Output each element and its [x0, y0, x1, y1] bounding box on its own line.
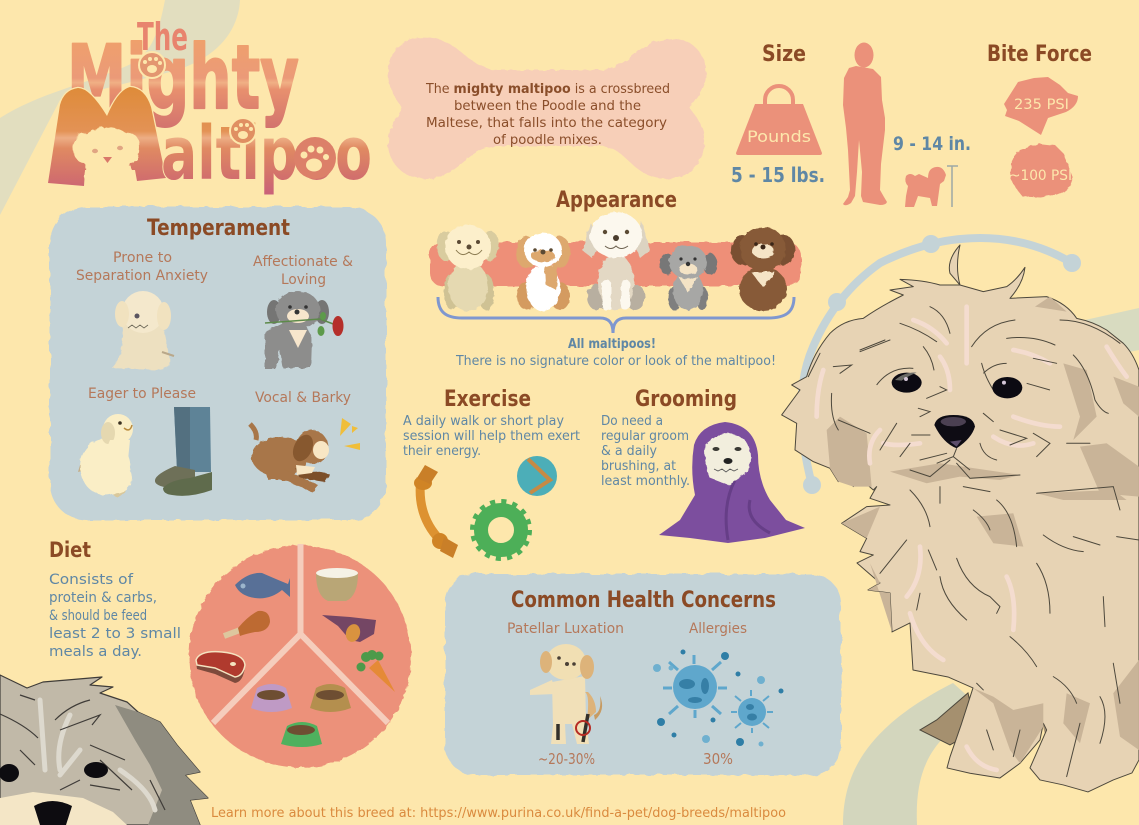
icon: green ring: [473, 502, 529, 558]
bite force heading: Bite Force: [987, 41, 1092, 67]
grooming text: & a daily: [601, 443, 657, 459]
icon: rice bowl: [316, 568, 358, 601]
icon: large dog head: [1004, 77, 1078, 135]
appearance caption: [455, 337, 776, 369]
logo: Mighty: Mighty: [67, 26, 299, 129]
bone text: Maltese, that falls into the category: [426, 115, 667, 131]
icon: drumstick: [224, 611, 270, 636]
appearance caption: All maltipoos!: [568, 337, 656, 352]
grooming section: [601, 386, 805, 543]
dog: grey face: [679, 257, 697, 266]
panel: common health concerns: [445, 574, 841, 775]
icon: legs and shoes: [155, 407, 212, 496]
item: patellar luxation: [507, 621, 624, 768]
size heading: Size: [762, 41, 806, 67]
panel: temperament: [50, 207, 386, 520]
bite force section: [987, 41, 1092, 197]
eyes: [877, 363, 1050, 398]
item: vocal and barky: [250, 390, 360, 492]
virus small: [731, 690, 773, 733]
grooming text: brushing, at: [601, 458, 676, 474]
temperament heading: Temperament: [147, 215, 290, 241]
dark rear between legs: [1033, 690, 1067, 743]
item: vocal and barky: Vocal & Barky: [255, 390, 351, 406]
dog: white and tan face: [533, 248, 553, 254]
panel background: [445, 574, 841, 775]
icon: purple bowl: [251, 684, 292, 712]
icon: weight: Pounds: [747, 127, 811, 146]
dog: brown face: [754, 242, 774, 250]
fur shading: [827, 297, 1139, 763]
eyes and nose: [0, 762, 108, 825]
big dog illustration: [782, 245, 1139, 792]
item: affectionate: Loving: [281, 272, 326, 288]
item: separation anxiety: [76, 250, 208, 370]
grey ear: [115, 705, 208, 825]
virus large: [663, 655, 727, 718]
appearance heading: Appearance: [556, 187, 677, 213]
logo: dog features: [92, 146, 123, 163]
grooming text: least monthly.: [601, 473, 690, 489]
icon: tan bowl: [310, 684, 351, 712]
diet heading: Diet: [49, 538, 91, 562]
health heading: Common Health Concerns: [511, 587, 776, 613]
item: separation anxiety: Prone to: [113, 250, 172, 266]
bone text: between the Poodle and the: [454, 98, 641, 114]
grooming text: regular groom: [601, 428, 689, 444]
icon: small dog silhouette: [905, 167, 946, 207]
fur highlights: [817, 307, 1127, 770]
icon: weight: [736, 86, 822, 155]
grooming text: [601, 413, 690, 489]
item: patellar luxation: ~20-30%: [538, 750, 595, 768]
exercise section: [403, 386, 580, 558]
icon: small dog head: [1010, 144, 1073, 197]
item: patellar luxation: Patellar Luxation: [507, 621, 624, 637]
title logo: [48, 15, 372, 197]
logo: paws: [139, 52, 336, 179]
dog: cream face: [456, 240, 482, 255]
grooming heading: Grooming: [635, 386, 737, 412]
diet text: least 2 to 3 small: [49, 626, 181, 642]
appearance caption: There is no signature color or look of the maltipoo!: [455, 354, 776, 369]
diet text: meals a day.: [49, 644, 142, 660]
bottom-left grey dog: [0, 675, 208, 825]
head shape: [0, 675, 208, 825]
fur lines: [808, 307, 1139, 777]
icon: green bowl: [281, 722, 322, 747]
item: affectionate: [253, 254, 353, 369]
back paw: [920, 693, 977, 745]
exercise text: their energy.: [403, 443, 481, 459]
icon: rope toy: [414, 465, 458, 558]
logo: Maltipoo: [48, 87, 372, 197]
item: eager to please: [78, 386, 196, 497]
diet text: [49, 572, 181, 660]
235 PSI label: 235 PSI: [1014, 97, 1069, 113]
appearance section: [429, 187, 801, 369]
panel background: [50, 207, 386, 520]
dog silhouette: [782, 245, 1139, 792]
nose: [934, 415, 975, 470]
item: allergies: 30%: [703, 750, 733, 768]
dog: grey: [660, 245, 717, 310]
footer link: Learn more about this breed at: https://www.purina.co.uk/find-a-pet/dog-breeds/maltipoo: [211, 806, 786, 821]
exercise text: [403, 413, 580, 459]
item: allergies: Allergies: [689, 621, 747, 637]
bone text: of poodle mixes.: [493, 132, 602, 148]
icon: dog in purple blanket: [659, 422, 805, 543]
brace: [438, 297, 794, 333]
allergen dots: [653, 650, 784, 746]
pie plate: [189, 544, 411, 768]
diet text: Consists of: [49, 572, 134, 588]
dog: white and tan: [516, 233, 570, 311]
logo: dog face: [73, 127, 140, 187]
logo: Maltipoo: altipoo: [161, 111, 372, 197]
height ruler: [947, 166, 958, 207]
bone text: The mighty maltipoo is a crossbreed: [425, 81, 670, 97]
weight value: 5 - 15 lbs.: [731, 163, 825, 187]
item: affectionate: Affectionate &: [253, 254, 353, 270]
icon: human silhouette: [843, 42, 887, 205]
dog: white large: [582, 212, 650, 310]
diet text: & should be feed: [49, 608, 147, 624]
intro bone: [388, 38, 706, 179]
salmon backdrop: [429, 242, 801, 286]
100 PSI label: ~100 PSI: [1009, 168, 1072, 184]
diet text: protein & carbs,: [49, 590, 157, 606]
grooming text: Do need a: [601, 413, 663, 429]
dog: brown: [731, 227, 795, 311]
item: allergies: [653, 621, 784, 768]
item: eager to please: Eager to Please: [88, 386, 196, 402]
icon: steak: [196, 652, 245, 683]
exercise text: session will help them exert: [403, 428, 580, 444]
fur lines: [0, 695, 165, 810]
muzzle: [0, 792, 127, 825]
dog: cream: [437, 225, 499, 311]
icon: sweet potato: [322, 615, 376, 644]
blue arc behind dog: [801, 235, 1081, 494]
exercise text: A daily walk or short play: [403, 413, 564, 429]
bone text: [425, 81, 670, 148]
icon: ball: [517, 456, 557, 496]
dog: white large face: [603, 230, 629, 248]
size section: [731, 41, 971, 207]
icon: fish: [235, 573, 290, 598]
item: separation anxiety: Separation Anxiety: [76, 268, 208, 284]
height value: 9 - 14 in.: [893, 133, 971, 155]
bone shape: [388, 38, 706, 179]
logo: The: The: [137, 15, 188, 59]
icon: carrot: [356, 650, 395, 692]
fur highlights: [40, 700, 155, 810]
exercise heading: Exercise: [444, 386, 531, 412]
diet section: [49, 538, 411, 768]
